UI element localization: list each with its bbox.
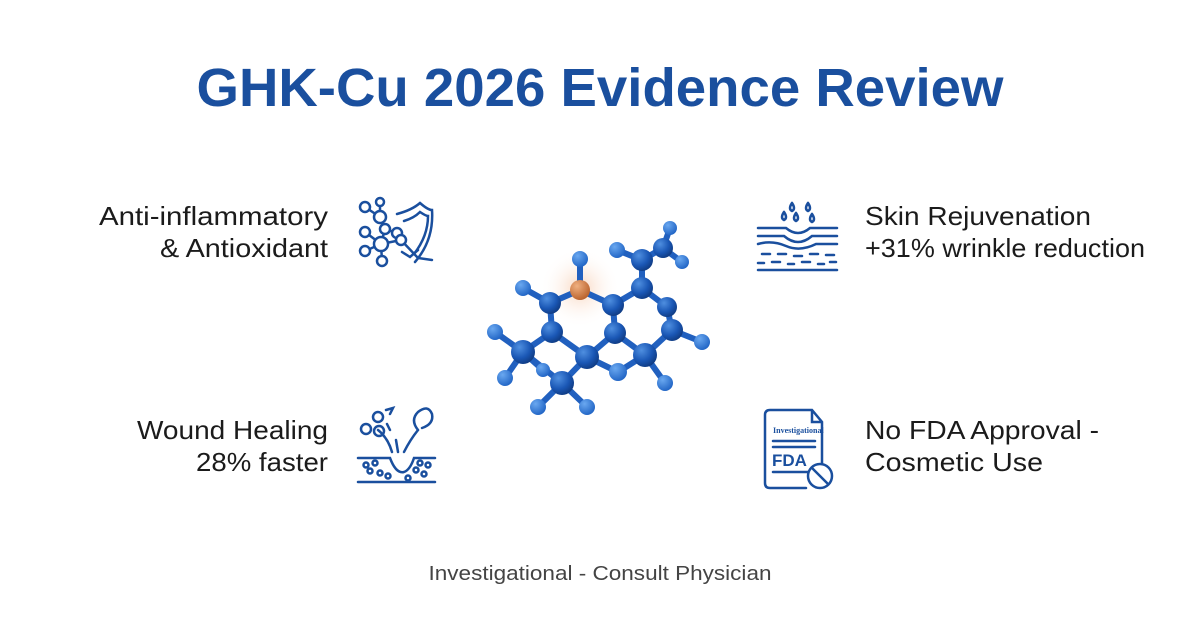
icon: FDA document <box>765 410 832 488</box>
text: anti-inflammatory <box>99 201 329 263</box>
text: wound healing: Wound Healing <box>137 415 328 445</box>
icon: FDA document: FDA <box>772 451 807 470</box>
text: FDA <box>865 415 1099 477</box>
icon: wound healing <box>358 408 435 482</box>
text: skin rejuvenation: +31% wrinkle reduction <box>865 233 1145 263</box>
icon: molecule shield <box>360 198 432 266</box>
text: wound healing <box>137 415 328 477</box>
text: skin rejuvenation: Skin Rejuvenation <box>865 201 1091 231</box>
icon: skin layers <box>758 203 837 270</box>
icon: FDA document: Investigational <box>773 426 824 435</box>
text: wound healing: 28% faster <box>196 447 328 477</box>
text: skin rejuvenation <box>865 201 1145 263</box>
title: GHK-Cu 2026 Evidence Review <box>196 58 1004 118</box>
footer note: Investigational - Consult Physician <box>428 563 772 585</box>
text: FDA: No FDA Approval - <box>865 415 1099 445</box>
text: FDA: Cosmetic Use <box>865 447 1043 477</box>
text: anti-inflammatory: Anti-inflammatory <box>99 201 328 231</box>
molecule <box>487 221 710 415</box>
text: anti-inflammatory: & Antioxidant <box>160 233 329 263</box>
